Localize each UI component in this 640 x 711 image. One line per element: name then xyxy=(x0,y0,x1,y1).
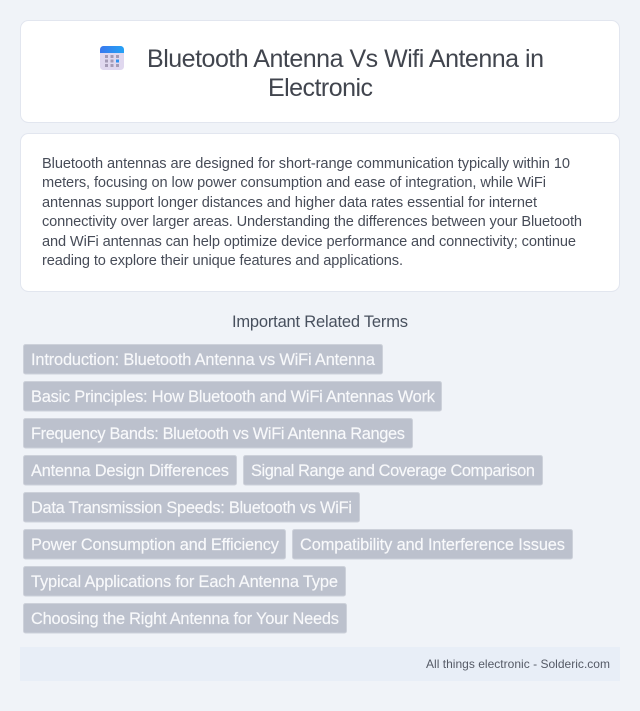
text block: description: meters, focusing on low power consumption and ease of integration, while WiFi xyxy=(42,175,546,191)
tag: choosing antenna: Choosing the Right Antenna for Your Needs xyxy=(31,610,339,628)
tag: basic principles: Basic Principles: How Bluetooth and WiFi Antennas Work xyxy=(31,388,436,406)
tag: choosing antenna xyxy=(24,604,346,633)
footer xyxy=(20,647,620,681)
title: Bluetooth Antenna Vs Wifi Antenna in xyxy=(147,45,544,73)
tag: introduction xyxy=(24,344,382,374)
heading: important related terms: Important Related Terms xyxy=(232,313,408,331)
tag: antenna design: Antenna Design Differences xyxy=(31,462,229,480)
tag: compatibility: Compatibility and Interference Issues xyxy=(300,536,565,554)
text block: description: connectivity over larger areas. Understanding the differences between your Bluetooth xyxy=(42,214,582,230)
text block: description: and WiFi antennas can help optimize device performance and connectivity; continue xyxy=(42,234,576,250)
tag: data transmission: Data Transmission Speeds: Bluetooth vs WiFi xyxy=(31,499,352,517)
tag: antenna design xyxy=(24,456,236,485)
tag: frequency bands: Frequency Bands: Bluetooth vs WiFi Antenna Ranges xyxy=(31,425,405,443)
footer: All things electronic - Solderic.com xyxy=(426,657,610,671)
tag list xyxy=(24,344,572,633)
tag: basic principles xyxy=(24,382,442,411)
tag: power consumption xyxy=(24,530,286,559)
tag: introduction: Introduction: Bluetooth Antenna vs WiFi Antenna xyxy=(31,351,376,369)
icon: calendar xyxy=(100,46,124,70)
title: Electronic xyxy=(268,74,373,102)
title xyxy=(147,45,544,102)
panel: description card xyxy=(20,134,620,292)
text block: description: reading to explore their unique features and applications. xyxy=(42,253,403,269)
tag: compatibility xyxy=(292,530,572,559)
tag: typical applications: Typical Applications for Each Antenna Type xyxy=(31,573,338,591)
tag: typical applications xyxy=(24,566,346,596)
text block: description xyxy=(42,156,582,269)
tag: signal range: Signal Range and Coverage Comparison xyxy=(251,462,535,480)
text block: description: antennas support longer distances and higher data rates essential for internet xyxy=(42,195,537,211)
tag: frequency bands xyxy=(24,418,412,448)
tag: power consumption: Power Consumption and Efficiency xyxy=(31,536,280,554)
panel: title card xyxy=(20,20,620,122)
text block: description: Bluetooth antennas are designed for short-range communication typically within 10 xyxy=(42,156,570,172)
tag: data transmission xyxy=(24,492,360,522)
tag: signal range xyxy=(244,456,542,485)
